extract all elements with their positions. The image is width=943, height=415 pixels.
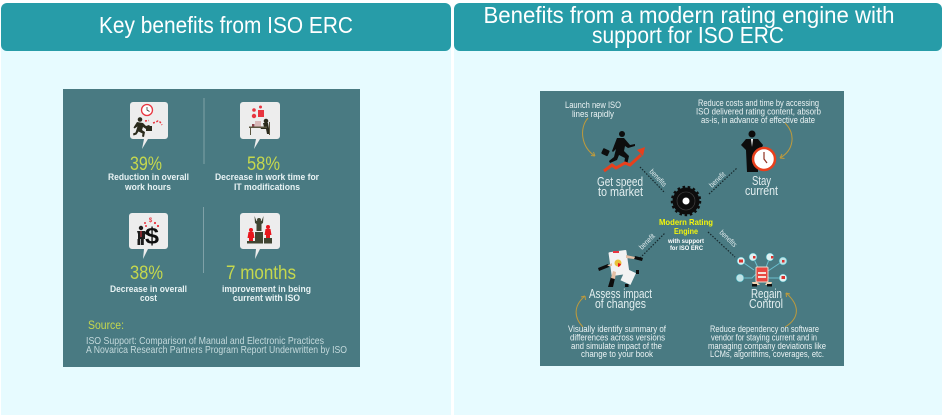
source note: Source:	[88, 320, 124, 332]
benefit: assess impact of changes: differences across versions	[570, 332, 665, 342]
stat: 38 percent: cost	[140, 293, 158, 304]
stat: 38 percent	[110, 213, 187, 304]
stat: 39 percent: Reduction in overall	[108, 172, 189, 183]
stat: 7 months: 7 months	[226, 263, 296, 284]
benefit: regain control: Control	[749, 297, 783, 311]
heading: modern rating engine	[454, 2, 942, 51]
icon: running businessman on rising line	[601, 131, 645, 171]
central gear: modern rating engine: for ISO ERC	[670, 245, 703, 252]
heading: key benefits	[1, 3, 451, 51]
stat: 7 months: improvement in being	[222, 284, 311, 295]
stat: 58 percent: 58%	[247, 154, 280, 175]
icon: worker at desk	[240, 102, 280, 149]
benefit: get speed to market: to market	[598, 185, 643, 199]
source note: A Novarica Research Partners Program Report Underwritten by ISO	[86, 344, 347, 356]
arrow: content to clock	[780, 123, 792, 158]
benefit: stay current: as-is, in advance of effective date	[701, 115, 815, 125]
connector: benefit: benefit	[707, 169, 728, 189]
benefit: get speed to market: lines rapidly	[572, 109, 614, 119]
benefit: stay current: Reduce costs and time by accessing	[698, 98, 819, 108]
source note: ISO Support: Comparison of Manual and Electronic Practices	[86, 335, 324, 347]
icon: man with dollar sign: $	[149, 218, 153, 224]
stat: 58 percent	[215, 102, 319, 193]
connector: benefits: benefits	[718, 228, 739, 249]
benefit: get speed to market: Launch new ISO	[565, 100, 621, 110]
panel: modern rating engine benefits	[454, 2, 942, 415]
arrow: dependency to heading	[785, 293, 796, 327]
benefit: get speed to market: Get speed	[597, 175, 643, 189]
benefit: regain control: managing company deviations like	[708, 341, 826, 351]
benefit: assess impact of changes: and simulate impact of the	[571, 341, 662, 351]
benefit: stay current: current	[745, 184, 778, 198]
stat: 39 percent	[108, 102, 189, 193]
benefit: stay current: Stay	[752, 174, 772, 188]
benefit: stay current: ISO delivered rating content, absorb	[696, 106, 821, 116]
benefit: assess impact of changes	[568, 231, 666, 359]
heading: modern rating engine: support for ISO ERC	[592, 22, 784, 48]
benefit: stay current	[696, 98, 821, 198]
stat: 38 percent: Decrease in overall	[110, 284, 187, 295]
benefit: assess impact of changes: Assess impact	[589, 287, 652, 301]
central gear: modern rating engine: Engine	[674, 226, 698, 236]
benefit: regain control: Reduce dependency on software	[710, 324, 819, 334]
icon: man with dollar sign: $	[145, 223, 159, 249]
arrow: launch to runner	[583, 118, 595, 156]
infographic: rating engine diagram	[540, 91, 844, 366]
stat: 58 percent: IT modifications	[234, 182, 300, 193]
icon: man with dollar sign	[129, 213, 168, 259]
benefit: regain control: Regain	[751, 287, 782, 301]
heading: key benefits: Key benefits from ISO ERC	[99, 12, 353, 38]
benefit: regain control: vendor for staying current and in	[711, 332, 817, 342]
icon: hands reviewing documents	[598, 250, 643, 287]
icon: businessman with clock	[741, 130, 775, 172]
stat: 39 percent: work hours	[124, 182, 171, 193]
stat: 58 percent: Decrease in work time for	[215, 172, 319, 183]
heading: modern rating engine: Benefits from a modern rating engine with	[484, 2, 894, 28]
icon: winners podium	[240, 213, 280, 259]
benefit: regain control	[708, 228, 826, 359]
icon: running man with clock	[130, 102, 168, 149]
benefit: assess impact of changes: change to your book	[581, 349, 653, 359]
benefit: get speed to market	[565, 100, 669, 199]
connector: benefits: benefits	[648, 167, 669, 189]
infographic: key benefits statistics	[63, 89, 360, 367]
central gear: modern rating engine: with support	[667, 238, 705, 245]
stat: 39 percent: 39%	[130, 154, 162, 175]
icon: tablet with connected nodes	[736, 253, 787, 286]
connector: benefit: benefit	[637, 231, 657, 251]
panel: key benefits	[1, 3, 451, 415]
stat: 7 months: current with ISO	[233, 293, 300, 304]
benefit: assess impact of changes: Visually identify summary of	[568, 324, 666, 334]
central gear: modern rating engine	[659, 188, 713, 252]
source note	[86, 320, 347, 356]
stat: 38 percent: 38%	[130, 263, 163, 284]
central gear: modern rating engine: Modern Rating	[659, 217, 713, 227]
benefit: regain control: LCMs, algorithms, coverages, etc.	[710, 349, 824, 359]
arrow: summary to heading	[576, 296, 586, 327]
stat: 7 months	[222, 213, 311, 304]
benefit: assess impact of changes: of changes	[595, 297, 646, 311]
